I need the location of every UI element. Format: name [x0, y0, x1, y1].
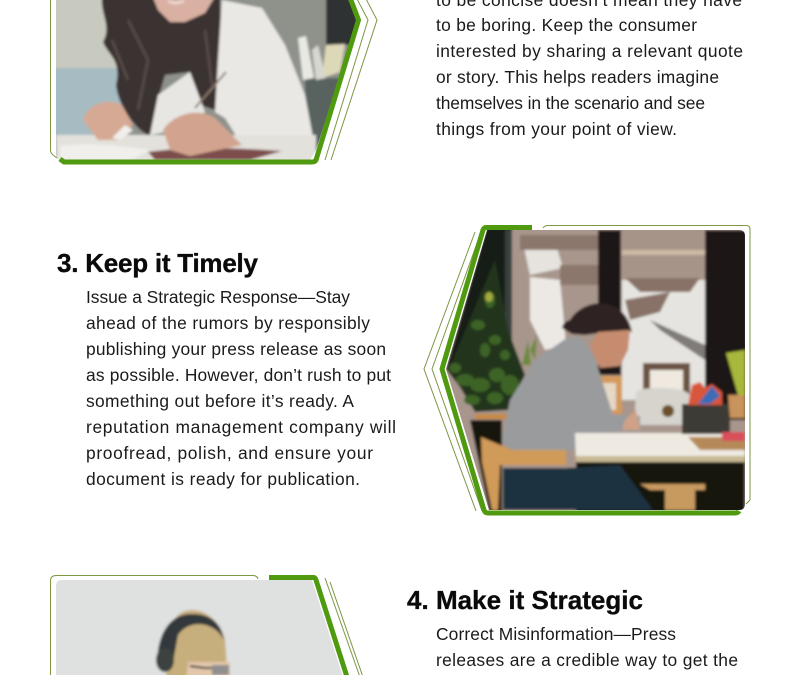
photo panel: woman with headphones: [50, 575, 364, 675]
photo panel: woman writing at desk: [50, 0, 377, 165]
text block: section 2 continuation: themselves in the scenario and see: [436, 93, 705, 113]
text block: section 3 body: reputation management company will: [86, 417, 396, 437]
heading: section 4: 4. Make it Strategic: [407, 585, 643, 615]
text block: section 3 body: ahead of the rumors by responsibly: [86, 313, 370, 333]
text block: section 2 continuation: interested by sharing a relevant quote: [436, 41, 743, 61]
text block: section 2 continuation: [436, 0, 743, 139]
photo panel: woman at table by window: [424, 225, 750, 515]
text block: section 4 body: [436, 624, 738, 670]
text block: section 3 body: proofread, polish, and ensure your: [86, 443, 373, 463]
text block: section 4 body: releases are a credible way to get the: [436, 650, 738, 670]
green accent frame: [269, 578, 348, 675]
green accent frame: [442, 228, 739, 513]
thin frame lines: [50, 0, 377, 160]
thin frame lines: [50, 576, 364, 675]
text block: section 3 body: Issue a Strategic Response—Stay: [86, 287, 350, 307]
heading: section 3: 3. Keep it Timely: [57, 248, 259, 278]
text block: section 3 body: document is ready for publication.: [86, 469, 360, 489]
photo: headphones and glasses: [50, 575, 350, 675]
text block: section 3 body: as possible. However, don’t rush to put: [86, 365, 391, 385]
green accent frame: [60, 0, 358, 162]
text block: section 3 body: something out before it’s ready. A: [86, 391, 354, 411]
photo: woman writing beside plants: [440, 225, 750, 515]
text block: section 3 body: publishing your press release as soon: [86, 339, 386, 359]
photo: woman with long dark hair: [50, 0, 370, 165]
text block: section 3 body: [86, 287, 396, 489]
text block: section 2 continuation: things from your point of view.: [436, 119, 677, 139]
text block: section 4 body: Correct Misinformation—Press: [436, 624, 676, 644]
text block: section 2 continuation: to be boring. Keep the consumer: [436, 15, 697, 35]
text block: section 2 continuation: or story. This helps readers imagine: [436, 67, 719, 87]
thin frame lines: [424, 226, 750, 511]
